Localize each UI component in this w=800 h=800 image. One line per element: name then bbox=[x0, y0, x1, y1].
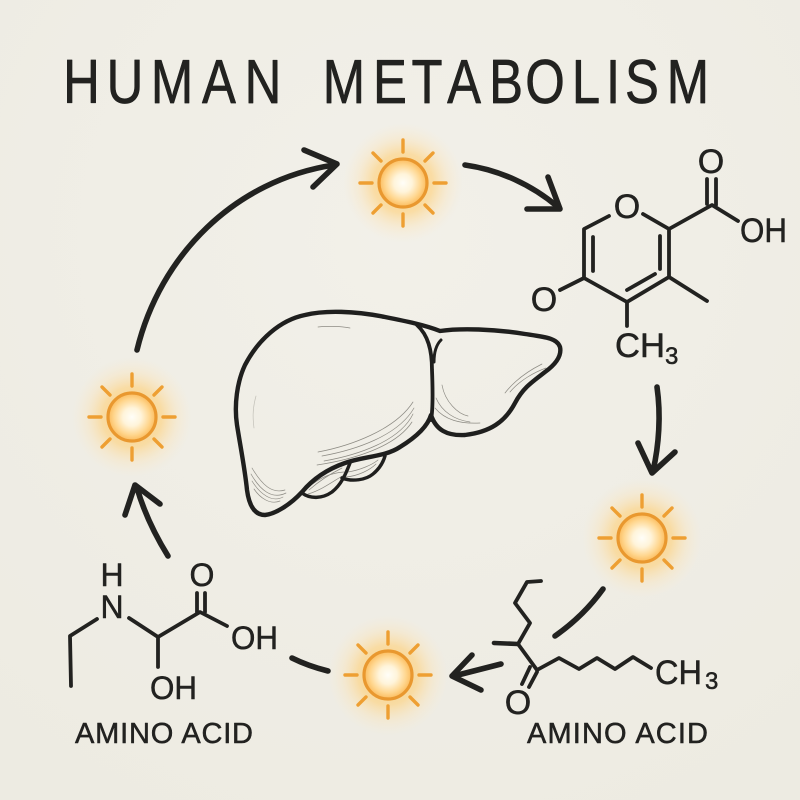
molecule: fatty chain amino acid bbox=[494, 581, 718, 750]
atom labels: O bbox=[505, 684, 531, 722]
atom labels: N bbox=[100, 589, 124, 625]
atom labels bbox=[531, 143, 787, 370]
liver outline bbox=[236, 312, 560, 515]
arrow: top sun to pyran molecule bbox=[465, 165, 560, 209]
atom labels: H bbox=[100, 557, 124, 593]
atom labels: O bbox=[698, 143, 724, 181]
label: amino acid right: AMINO ACID bbox=[527, 718, 708, 750]
atom labels: OH bbox=[150, 670, 197, 706]
molecule: fatty chain amino acid: 3 bbox=[705, 668, 718, 695]
icon: sun right bbox=[582, 478, 702, 598]
icon: sun bottom bbox=[328, 615, 448, 735]
gallbladder bbox=[302, 456, 385, 497]
liver shading lines bbox=[251, 326, 546, 502]
molecule: fatty chain amino acid: CH bbox=[655, 654, 702, 692]
liver lobe divider bbox=[417, 325, 433, 420]
atom labels: OH bbox=[231, 620, 278, 656]
icon: sun left bbox=[72, 357, 192, 477]
atom labels: OH bbox=[740, 212, 787, 250]
arrow: right sun to fatty chain bbox=[555, 589, 603, 636]
arrow: bottom sun to amino acid bbox=[292, 658, 328, 671]
atom labels: 3 bbox=[665, 343, 678, 370]
atom labels bbox=[100, 557, 278, 706]
icon: sun top bbox=[343, 123, 463, 243]
atom labels: O bbox=[531, 281, 557, 319]
atom labels: O bbox=[190, 557, 214, 593]
arrow: fatty chain to bottom sun bbox=[452, 655, 501, 690]
atom labels: O bbox=[614, 188, 640, 226]
arrow: amino acid to left sun bbox=[125, 485, 168, 556]
arrow: left sun to top sun bbox=[137, 150, 337, 350]
atom labels: CH bbox=[615, 327, 665, 365]
label: amino acid left: AMINO ACID bbox=[75, 718, 253, 750]
arrow: pyran molecule to right sun bbox=[638, 387, 675, 473]
molecule: pyran carboxylic acid bbox=[531, 143, 787, 370]
icon: liver bbox=[236, 312, 560, 515]
molecule: amino acid left bbox=[70, 557, 278, 750]
title: HUMAN METABOLISM bbox=[63, 48, 709, 117]
